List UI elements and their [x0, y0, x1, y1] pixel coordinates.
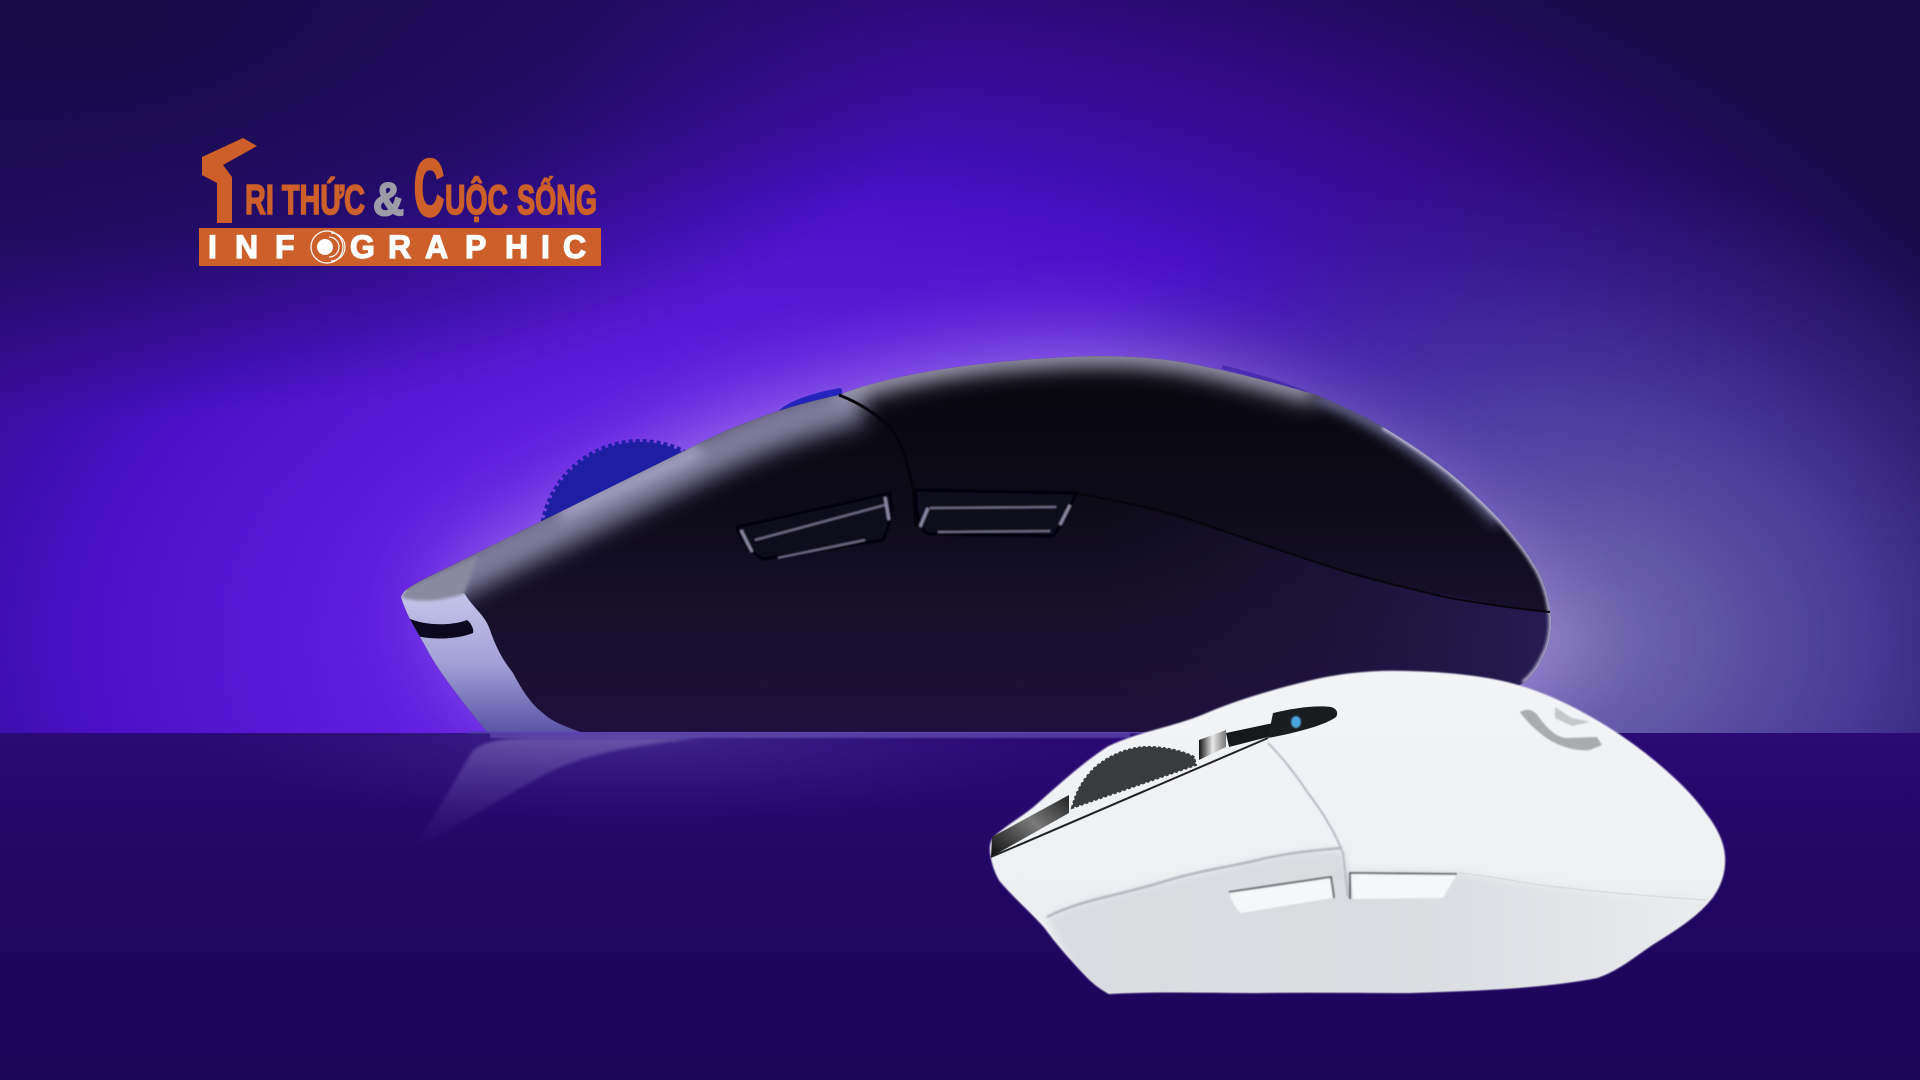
logo big T: [202, 138, 257, 223]
brand G logo: [1520, 707, 1602, 750]
shell seam line: [839, 395, 916, 527]
white mouse wheel: [1072, 747, 1196, 808]
background: purple gradient sky: [0, 0, 1920, 733]
logo text: Sống: SỐNG: [517, 175, 597, 223]
floor with horizon: [0, 731, 1920, 1080]
side contour line: [1076, 493, 1550, 612]
logo ampersand: &: [373, 173, 404, 225]
right contour line: [1457, 873, 1706, 900]
logo O emblem: [311, 231, 345, 263]
nose lower panel: [395, 590, 580, 740]
logo: Tri Thức & Cuộc Sống Infographic: [199, 138, 601, 266]
logo text: Infographic: INF O GRAPHIC: [208, 229, 586, 265]
lower white skirt: [1050, 850, 1671, 993]
seam lines: [1268, 743, 1348, 897]
white side button front: [1350, 873, 1457, 899]
lower right body lightening: [1204, 528, 1552, 686]
logo text: Cuộc: UỘC: [445, 175, 508, 223]
white mouse body: [991, 672, 1724, 993]
mouse reflection on floor: [415, 733, 1130, 848]
purple top button sliver: [1222, 367, 1308, 394]
white mouse: [991, 672, 1730, 1000]
scroll wheel: blue serrated: [541, 441, 739, 639]
white side button back: [1229, 877, 1334, 913]
logo orange bar: [199, 228, 601, 266]
side button back: [737, 493, 891, 559]
blue DPI button: [778, 388, 842, 416]
black mouse: [395, 353, 1552, 740]
logo big C: C: [414, 143, 444, 232]
logo text: Tri Thức: RI THỨC: [245, 175, 365, 223]
nose top cap: [401, 556, 478, 601]
blue LED: [1291, 716, 1301, 728]
dark scroll slot: [991, 706, 1337, 857]
side button front: [916, 490, 1076, 536]
mouse body shell: [401, 356, 1551, 732]
rim highlight: [395, 353, 1552, 740]
nose sensor slot: [408, 618, 473, 639]
